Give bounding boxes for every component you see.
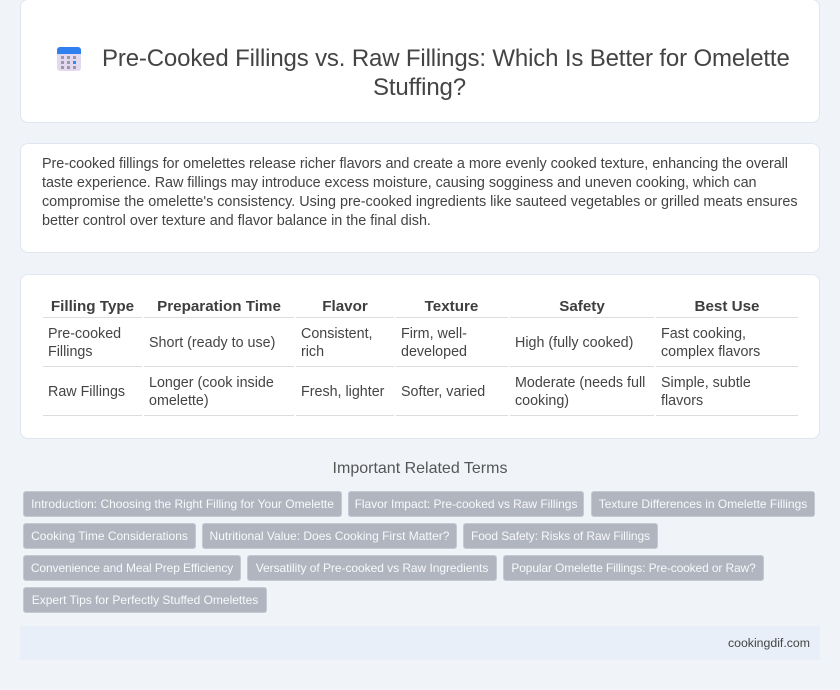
comparison table: omelette) [149, 393, 209, 409]
comparison table: Best Use [694, 298, 760, 315]
tags: related terms: Popular Omelette Fillings: Pre-cooked or Raw? [511, 561, 756, 575]
tags: related terms: Food Safety: Risks of Raw Fillings [471, 529, 650, 543]
comparison table: Fast cooking, [661, 326, 746, 342]
comparison table: Texture [425, 298, 478, 315]
text block: intro paragraph: Pre-cooked fillings for omelettes release richer flavors and create a more evenly cooked texture, enhancing the overall [42, 156, 788, 172]
comparison table: complex flavors [661, 344, 760, 360]
heading: title: Stuffing? [373, 74, 466, 101]
tags: related terms: Introduction: Choosing the Right Filling for Your Omelette [31, 497, 334, 511]
panel: intro text [20, 143, 820, 253]
comparison table: developed [401, 344, 467, 360]
comparison table: Preparation Time [157, 298, 281, 315]
icon: calendar [57, 47, 81, 71]
text block: intro paragraph: compromise the omelette's consistency. Using pre-cooked ingredients like sauteed vegetables or grilled meats ensures [42, 194, 798, 210]
panel: title card [20, 0, 820, 123]
comparison table: Safety [559, 298, 605, 315]
tags: related terms: Nutritional Value: Does Cooking First Matter? [210, 529, 449, 543]
comparison table: Simple, subtle [661, 375, 751, 391]
tags: related terms [23, 491, 815, 613]
comparison table: Raw Fillings [48, 384, 125, 400]
comparison table: rich [301, 344, 324, 360]
comparison table: Moderate (needs full [515, 375, 645, 391]
comparison table: Short (ready to use) [149, 335, 275, 351]
comparison table: Softer, varied [401, 384, 485, 400]
comparison table: flavors [661, 393, 703, 409]
comparison table: Fresh, lighter [301, 384, 384, 400]
footer: source: cookingdif.com [728, 636, 810, 650]
comparison table: cooking) [515, 393, 569, 409]
heading: related terms: Important Related Terms [333, 460, 507, 477]
tags: related terms: Cooking Time Considerations [31, 529, 188, 543]
text block: intro paragraph: better control over texture and flavor balance in the final dish. [42, 213, 431, 229]
heading: title: Pre-Cooked Fillings vs. Raw Fillings: Which Is Better for Omelette [102, 45, 790, 72]
text block: intro paragraph [42, 156, 798, 229]
panel: comparison table [20, 274, 820, 439]
footer bar [20, 626, 820, 660]
text block: intro paragraph: taste experience. Raw fillings may introduce excess moisture, causing sogginess and uneven cooking, which can [42, 175, 756, 191]
comparison table: Pre-cooked [48, 326, 121, 342]
comparison table: Filling Type [51, 298, 134, 315]
comparison table [43, 298, 798, 416]
tags: related terms: Flavor Impact: Pre-cooked vs Raw Fillings [355, 497, 577, 511]
comparison table: Longer (cook inside [149, 375, 274, 391]
tags: related terms: Texture Differences in Omelette Fillings [599, 497, 807, 511]
comparison table: Consistent, [301, 326, 373, 342]
comparison table: High (fully cooked) [515, 335, 633, 351]
tags: related terms: Convenience and Meal Prep Efficiency [31, 561, 233, 575]
comparison table: Fillings [48, 344, 92, 360]
heading: title [102, 45, 790, 101]
comparison table: Firm, well- [401, 326, 467, 342]
comparison table: Flavor [322, 298, 368, 315]
tags: related terms: Expert Tips for Perfectly Stuffed Omelettes [32, 593, 258, 607]
tags: related terms: Versatility of Pre-cooked vs Raw Ingredients [256, 561, 488, 575]
